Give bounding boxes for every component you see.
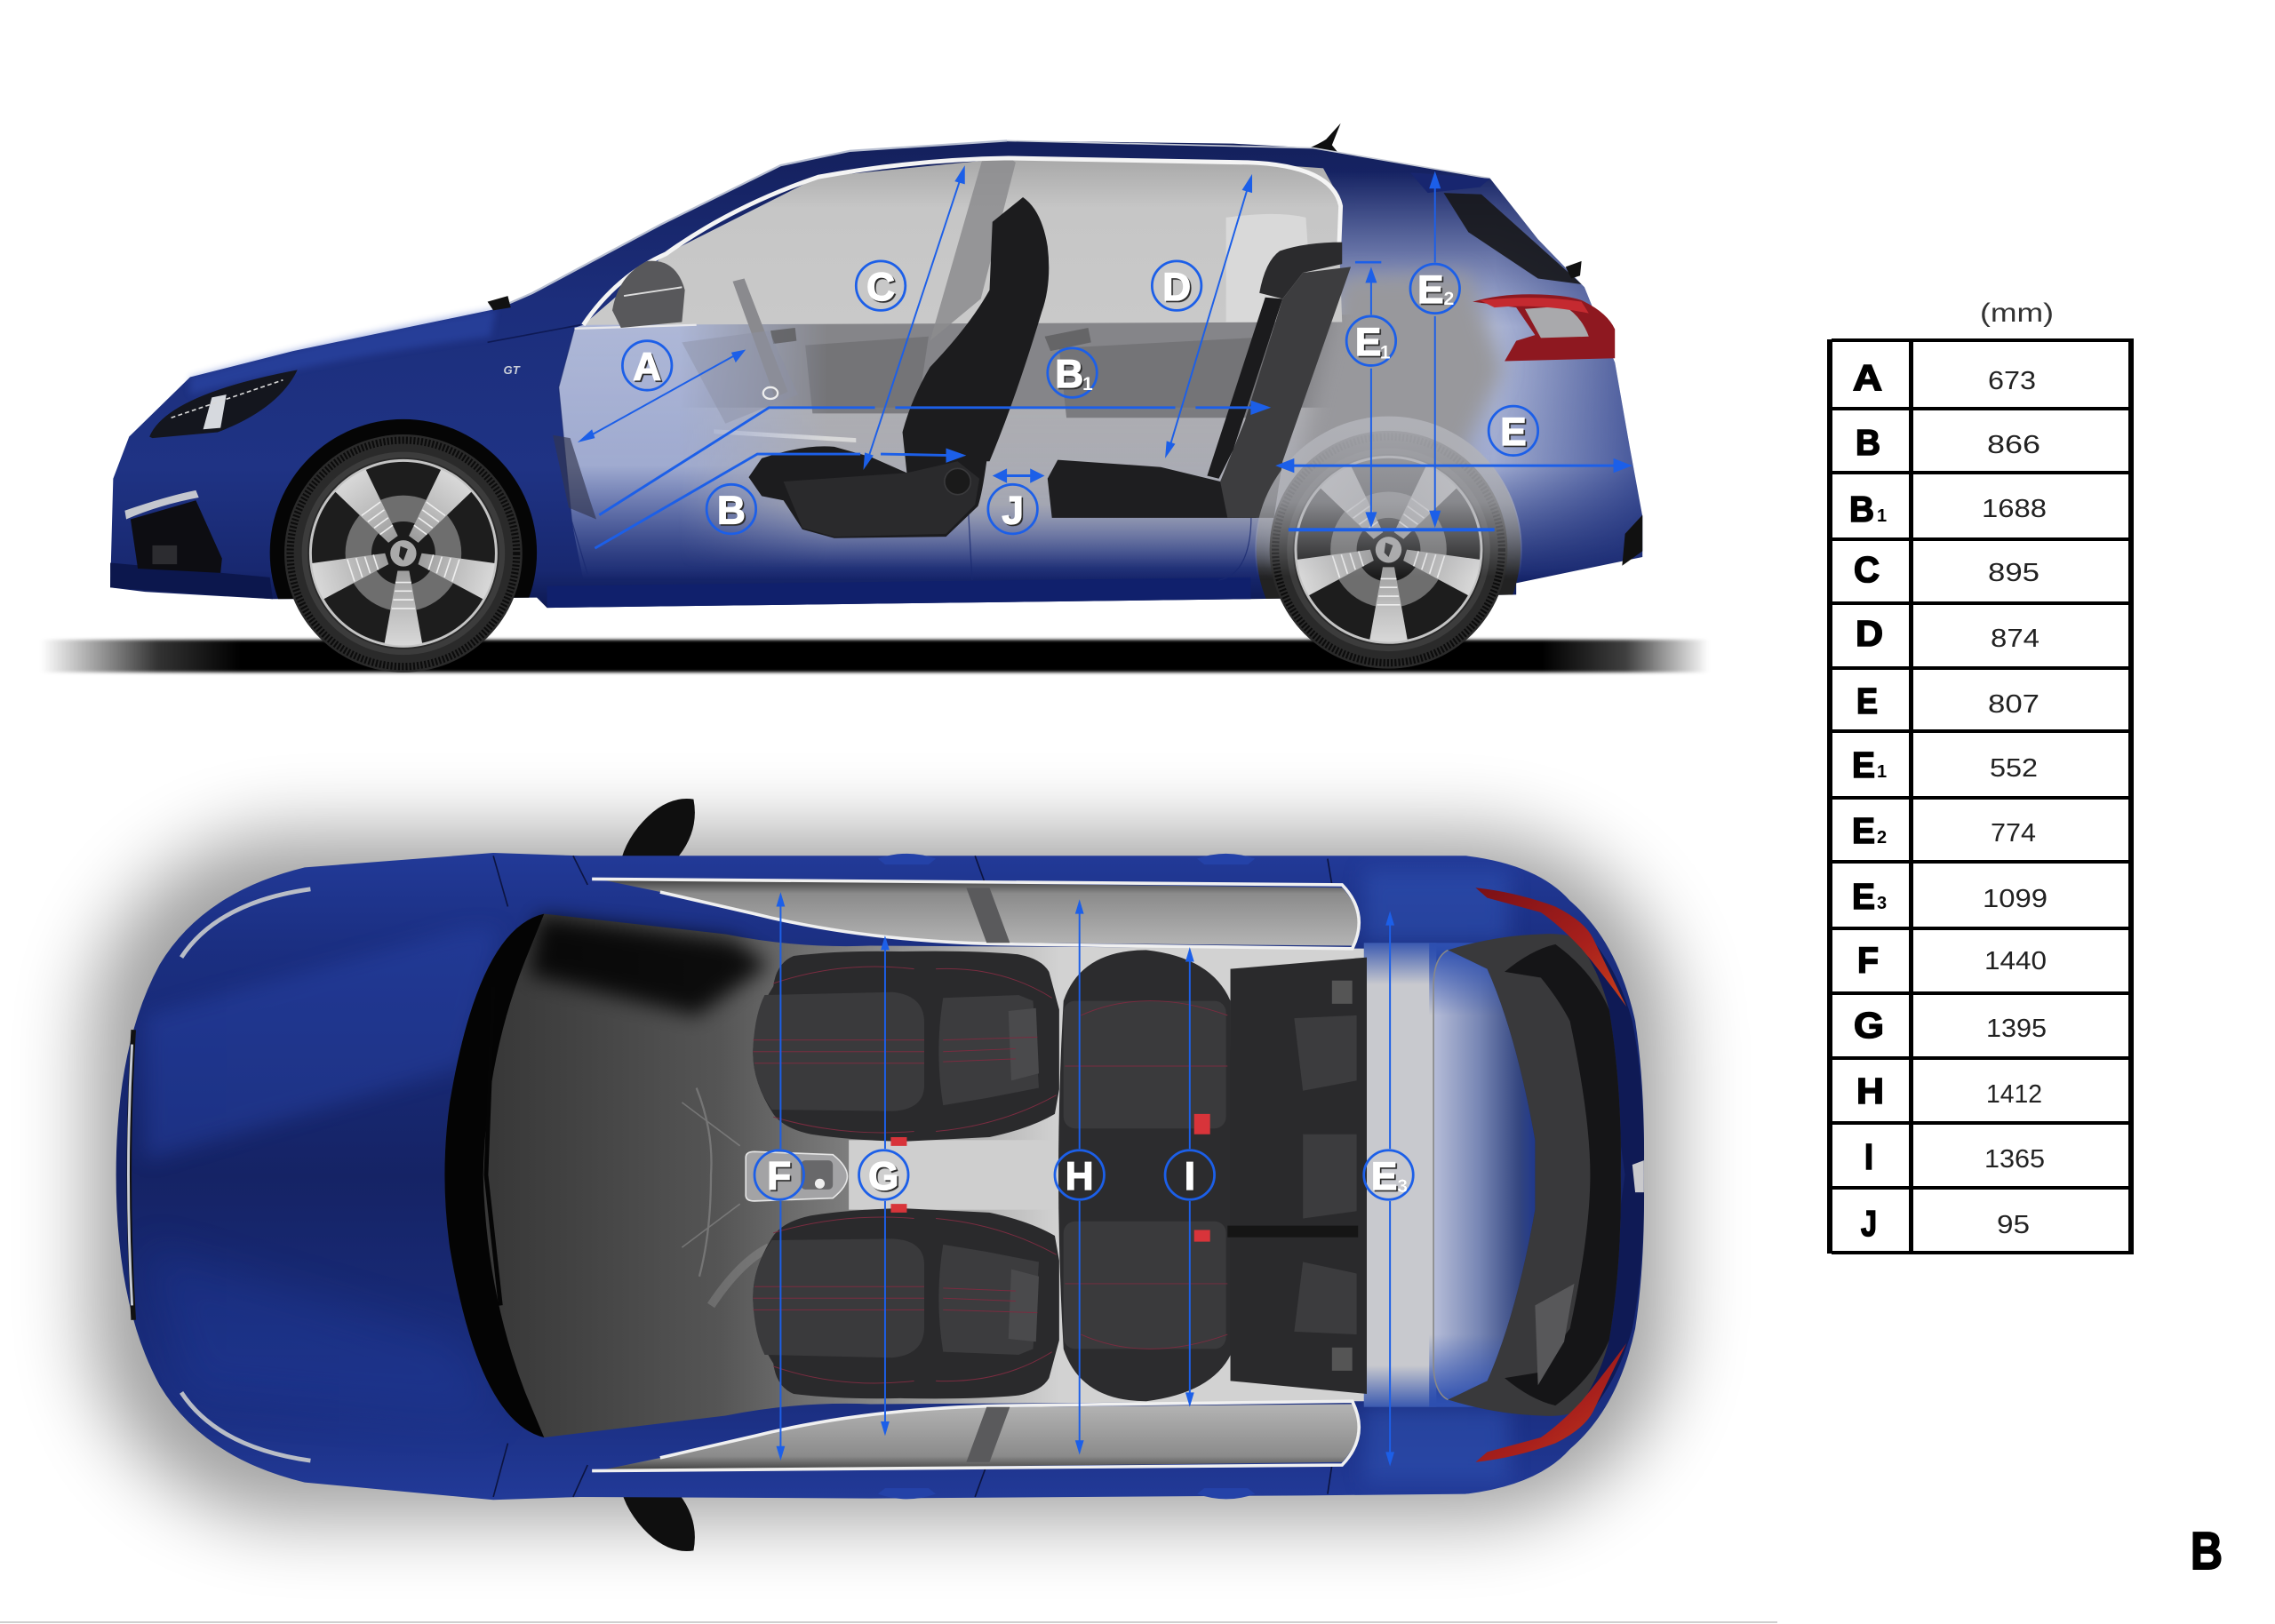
body highlights xyxy=(110,140,1490,608)
rear spoiler xyxy=(1410,172,1490,193)
row B1: 1 xyxy=(1877,506,1887,526)
row E1 xyxy=(1852,744,2038,785)
ground shadow xyxy=(41,640,1709,673)
rear wheel xyxy=(1270,431,1507,669)
rear floor frame line xyxy=(1433,950,1448,1400)
marker B1 xyxy=(1048,348,1097,397)
row E3: E xyxy=(1852,876,1875,917)
rear bumper xyxy=(1622,515,1642,566)
tail lamp xyxy=(1473,294,1615,362)
pale overlay xyxy=(558,179,1642,574)
B pillars in window bands xyxy=(966,888,1010,1462)
GT badge: GT xyxy=(504,363,521,377)
door shut lines xyxy=(559,328,1251,580)
wiper xyxy=(486,986,500,1305)
arrow: dimension A xyxy=(578,349,746,442)
row E2: E xyxy=(1852,810,1875,851)
rear headrest seen through glass xyxy=(1226,214,1313,322)
marker H: H xyxy=(1066,1155,1094,1198)
row E: E xyxy=(1856,681,1878,721)
row B xyxy=(1856,422,2040,463)
centre console xyxy=(746,1151,847,1201)
windscreen and cabin xyxy=(444,914,1371,1437)
lower tail lamp xyxy=(1475,1343,1626,1462)
arrow: dimension D xyxy=(1165,174,1252,458)
arrow: dimension B1 xyxy=(599,401,1271,515)
chrome window trim xyxy=(583,158,1341,325)
row C xyxy=(1854,549,2040,590)
top view of the car xyxy=(90,799,1672,1551)
marker F xyxy=(754,1150,804,1199)
rear badge xyxy=(1632,1160,1644,1192)
door handles xyxy=(878,854,1255,1499)
row J xyxy=(1861,1203,2030,1244)
arrow: dimension E2 xyxy=(1429,171,1441,528)
row H xyxy=(1856,1071,2042,1111)
B pillar xyxy=(930,156,1016,341)
dash, mirror and steering wheel xyxy=(553,261,798,520)
marker E2 xyxy=(1410,264,1459,314)
row E1: 552 xyxy=(1990,754,2038,783)
rear wheel arch xyxy=(1257,490,1521,599)
door handles xyxy=(770,328,1091,351)
marker J xyxy=(988,484,1037,534)
rear seat cushion xyxy=(1048,460,1257,518)
marker E: E xyxy=(1500,410,1527,454)
marker C xyxy=(856,261,906,310)
row B: 866 xyxy=(1987,431,2040,459)
row B1: B xyxy=(1849,489,1874,529)
marker D xyxy=(1152,261,1201,310)
row E3 xyxy=(1852,876,2048,917)
belt line trim xyxy=(575,325,697,329)
rear lit panel xyxy=(1433,950,1535,1400)
arrow: dimension B xyxy=(595,449,966,548)
marker E1: 1 xyxy=(1380,342,1391,362)
antenna xyxy=(1298,123,1341,152)
marker A xyxy=(622,341,672,390)
rear seat buckles xyxy=(1194,1114,1210,1242)
row H: 1412 xyxy=(1986,1080,2042,1109)
arrow: dimension H xyxy=(1075,899,1084,1455)
rear bench panels xyxy=(1064,981,1358,1371)
upper window band xyxy=(598,879,1358,946)
rear wheel fade xyxy=(1255,417,1522,683)
marker E1: E xyxy=(1355,321,1381,364)
row E3: 1099 xyxy=(1983,885,2048,913)
rear bench cushion xyxy=(1058,950,1233,1401)
row D: 874 xyxy=(1991,625,2040,653)
row G: G xyxy=(1854,1005,1884,1046)
row D: D xyxy=(1856,613,1883,654)
row J: 95 xyxy=(1997,1211,2030,1239)
rear seat stitching xyxy=(1065,1001,1227,1349)
marker E2: E xyxy=(1417,268,1444,312)
arrow: dimension E1 xyxy=(1355,261,1381,528)
arrow: dimension E3 xyxy=(1385,911,1394,1467)
marker F: F xyxy=(767,1155,791,1198)
front seat right xyxy=(753,1204,1059,1398)
soft shadow around the car xyxy=(90,832,1672,1520)
side door trim lines xyxy=(493,856,1332,1497)
upper door mirror xyxy=(619,799,695,888)
row E2: 774 xyxy=(1991,819,2036,848)
front wheel xyxy=(284,434,523,673)
row D xyxy=(1856,613,2040,654)
version letter B: B xyxy=(2191,1522,2223,1580)
windscreen dark edge xyxy=(444,914,544,1437)
rear lit panel bottom cap xyxy=(1429,1334,1523,1407)
row I: 1365 xyxy=(1984,1145,2045,1174)
door card xyxy=(667,314,1364,570)
dark glare at top of windscreen xyxy=(530,917,769,1015)
arrow: dimension I xyxy=(1185,947,1194,1407)
marker J: J xyxy=(1002,489,1024,532)
marker G xyxy=(859,1150,908,1199)
rear quarter grey xyxy=(1297,267,1510,451)
rear seat back and headrest xyxy=(1207,243,1351,518)
row C: 895 xyxy=(1988,559,2040,587)
row H: H xyxy=(1856,1071,1884,1111)
lower window band xyxy=(598,1404,1358,1471)
row A: A xyxy=(1853,357,1882,398)
lower door mirror xyxy=(619,1462,695,1551)
row E2 xyxy=(1852,810,2036,851)
rear lit panel top cap xyxy=(1429,943,1523,1015)
cutaway of the body panels xyxy=(558,179,1642,574)
rear window dark band xyxy=(1505,944,1621,1405)
row E3: 3 xyxy=(1877,894,1887,913)
row E1: E xyxy=(1852,744,1875,785)
row G xyxy=(1854,1005,2047,1046)
row G: 1395 xyxy=(1986,1015,2047,1043)
arrow: dimension E base line xyxy=(1289,528,1495,531)
side view of the car xyxy=(41,123,1709,686)
rear window glare xyxy=(1535,1284,1574,1385)
rear bench back xyxy=(1231,958,1367,1394)
marker B1: 1 xyxy=(1082,374,1093,394)
row I xyxy=(1864,1136,2045,1177)
rear window xyxy=(1448,934,1621,1416)
front wheel arch xyxy=(270,419,537,599)
row F xyxy=(1857,940,2047,981)
row B1: 1688 xyxy=(1982,495,2047,523)
rear floor behind seats xyxy=(1364,943,1436,1407)
table grid xyxy=(1827,338,2134,1254)
row E xyxy=(1856,681,2040,721)
front chrome and lights xyxy=(128,889,310,1461)
dimensions table xyxy=(1827,338,2134,1254)
headlamp xyxy=(149,370,298,438)
unit label: (mm) xyxy=(1980,299,2054,328)
arrow: dimension G xyxy=(881,935,890,1436)
marker E xyxy=(1489,406,1538,456)
marker E1 xyxy=(1346,316,1396,365)
dash details xyxy=(682,1088,769,1305)
row E: 807 xyxy=(1988,690,2040,719)
car body xyxy=(110,140,1642,608)
row B1 xyxy=(1849,489,2047,529)
row F: F xyxy=(1857,940,1879,981)
chrome trim xyxy=(592,879,1359,1471)
row B: B xyxy=(1856,422,1880,463)
marker B xyxy=(706,484,756,534)
row I: I xyxy=(1864,1136,1873,1177)
row F: 1440 xyxy=(1984,947,2047,975)
centre floor xyxy=(849,1140,1066,1210)
row C: C xyxy=(1854,549,1880,590)
marker E3: E xyxy=(1371,1155,1397,1198)
marker C: C xyxy=(866,266,895,309)
upper tail lamp xyxy=(1475,888,1626,1007)
marker H xyxy=(1055,1150,1104,1199)
rear wiper stub xyxy=(1566,261,1582,278)
front seat xyxy=(748,197,1049,538)
marker B: B xyxy=(717,489,746,532)
marker A: A xyxy=(633,346,661,389)
front seat left xyxy=(753,951,1059,1146)
arrow: dimension C xyxy=(863,165,965,470)
marker E3 xyxy=(1364,1150,1413,1199)
wing mirror base xyxy=(488,296,511,310)
marker I xyxy=(1165,1150,1215,1199)
row A xyxy=(1853,357,2036,398)
row A: 673 xyxy=(1988,367,2036,395)
hood reflections xyxy=(145,871,1644,1483)
row J: J xyxy=(1861,1203,1877,1244)
car body from above xyxy=(116,853,1644,1500)
marker B1: B xyxy=(1055,353,1083,396)
front grille and fog lamp xyxy=(124,490,222,573)
row E1: 1 xyxy=(1877,762,1887,782)
arrow: dimension F xyxy=(776,892,785,1461)
row E2: 2 xyxy=(1877,828,1887,848)
marker E2: 2 xyxy=(1444,289,1454,309)
marker E3: 3 xyxy=(1397,1176,1408,1197)
pale door and quarter panels xyxy=(558,179,1642,574)
marker G: G xyxy=(868,1155,898,1198)
window glass xyxy=(583,158,1342,325)
arrow: dimension E xyxy=(1275,458,1632,473)
rear side window xyxy=(1444,193,1582,284)
marker I: I xyxy=(1185,1155,1195,1198)
arrow: dimension J xyxy=(993,468,1045,483)
marker D: D xyxy=(1162,266,1191,309)
bottom rule xyxy=(0,1621,1777,1623)
